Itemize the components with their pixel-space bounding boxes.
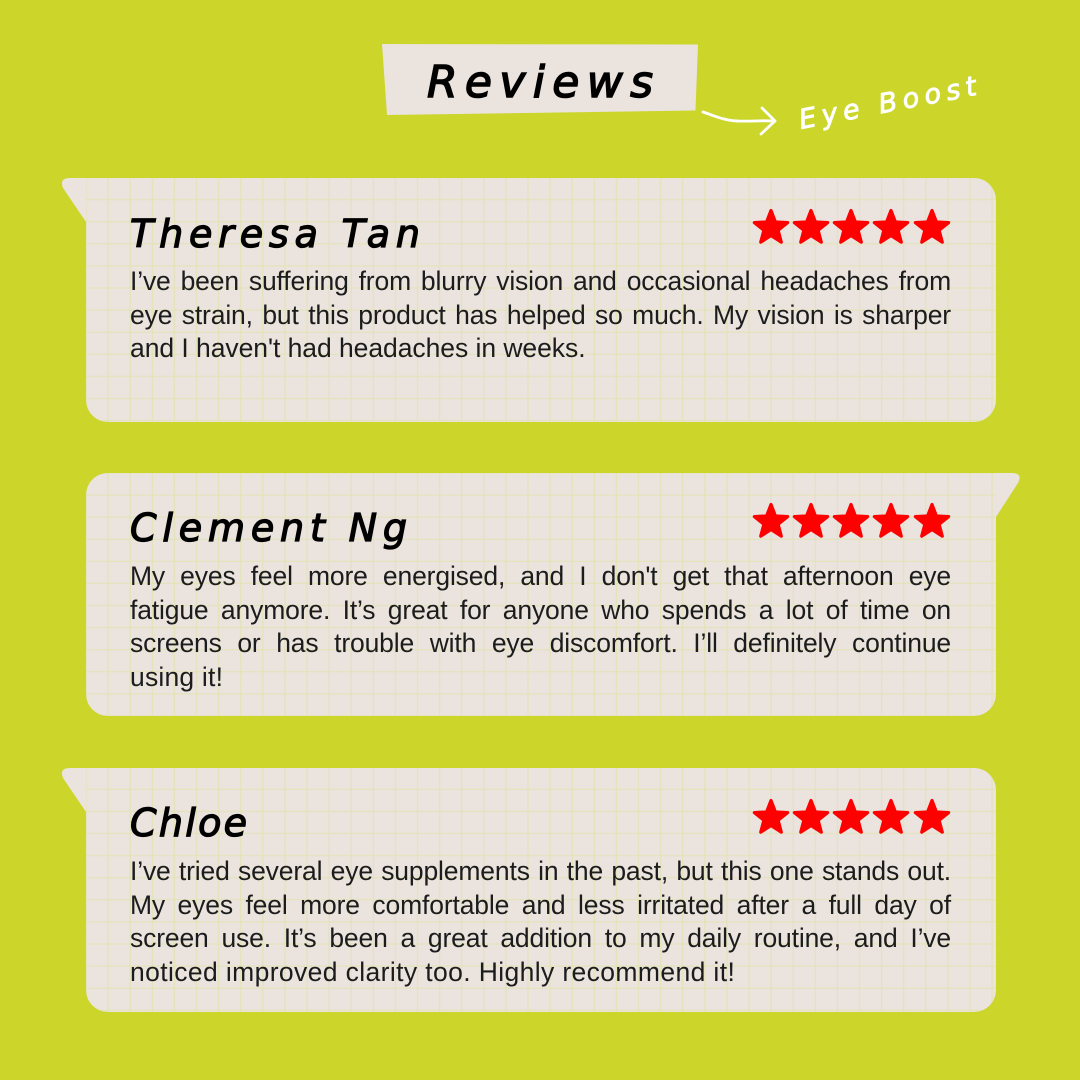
- review text: My eyes feel more comfortable and less irritated after a full day of: [130, 890, 951, 920]
- reviewer name: Theresa Tan: [130, 212, 420, 256]
- review text: My eyes feel more energised, and I don't get that afternoon eye: [130, 561, 951, 591]
- title: Reviews tape: [382, 44, 698, 115]
- reviewer name: Clement Ng: [130, 506, 407, 550]
- star rating: [754, 504, 949, 536]
- star rating: [754, 210, 949, 242]
- review text: and I haven't had headaches in weeks.: [130, 333, 586, 363]
- review text: I’ve been suffering from blurry vision and occasional headaches from: [130, 266, 951, 296]
- star rating: [754, 800, 949, 832]
- review text: [130, 266, 951, 363]
- review text: screen use. It’s been a great addition to my daily routine, and I’ve: [130, 923, 951, 953]
- review text: noticed improved clarity too. Highly recommend it!: [130, 957, 735, 987]
- review text: using it!: [130, 662, 223, 692]
- panel: Theresa Tan review: [62, 178, 996, 422]
- panel: Clement Ng review: [86, 473, 1020, 716]
- review text: eye strain, but this product has helped so much. My vision is sharper: [130, 300, 951, 330]
- review text: fatigue anymore. It’s great for anyone who spends a lot of time on: [130, 595, 951, 625]
- review text: screens or has trouble with eye discomfort. I’ll definitely continue: [130, 628, 951, 658]
- review text: I’ve tried several eye supplements in the past, but this one stands out.: [130, 856, 951, 886]
- review text: [130, 561, 951, 692]
- review text: [130, 856, 952, 987]
- reviewer name: Chloe: [130, 801, 247, 845]
- arrow: points to Eye Boost: [702, 106, 776, 136]
- panel: Chloe review: [62, 768, 996, 1012]
- title: Reviews tape: Reviews: [427, 57, 653, 108]
